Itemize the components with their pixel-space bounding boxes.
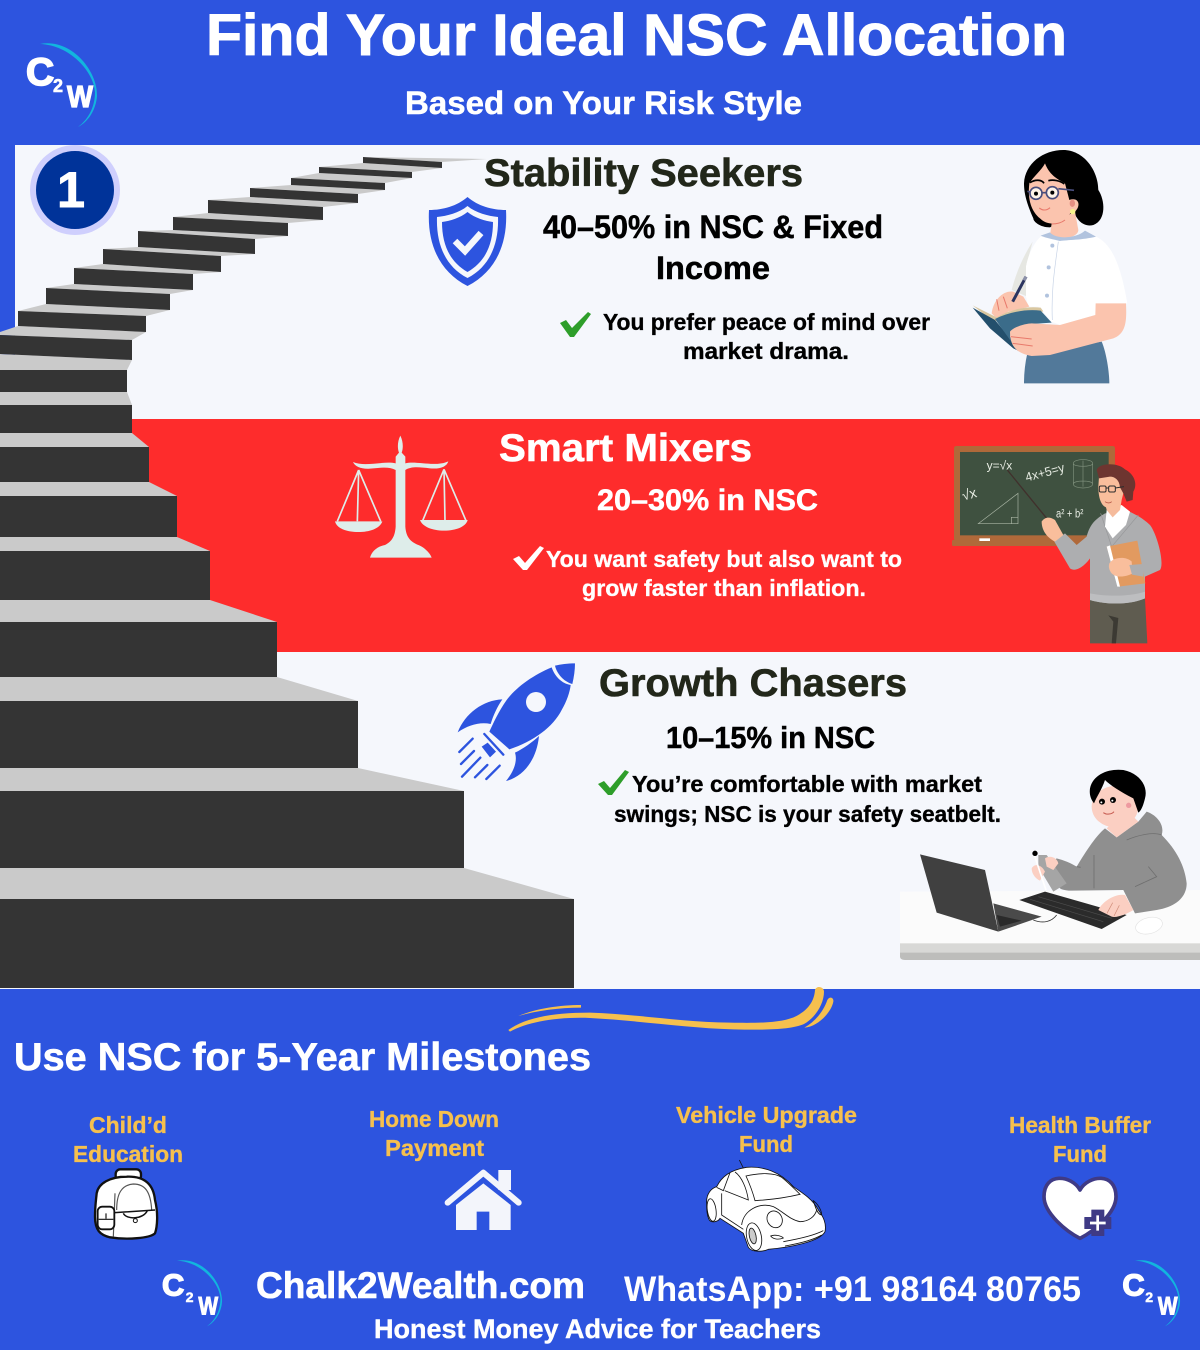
icon: green check 3: [598, 770, 629, 795]
milestone label: Vehicle Upgrade Fund: Vehicle Upgrade: [676, 1102, 857, 1128]
logo: C2W footer right: W: [1158, 1292, 1178, 1320]
logo: C2W footer left: [162, 1260, 222, 1326]
step number badge: 1: [57, 162, 85, 218]
logo: C2W header: W: [67, 79, 94, 114]
title: Find Your Ideal NSC Allocation: [206, 3, 1067, 68]
logo: C2W header: C: [26, 51, 54, 94]
panel: growth chasers: [0, 652, 1200, 989]
allocation: 10–15% in NSC: 10–15% in NSC: [666, 720, 875, 755]
heading: Use NSC for 5-Year Milestones: Use NSC for 5-Year Milestones: [14, 1036, 591, 1079]
illustration: teacher at chalkboard: 4x+5=y: [1024, 461, 1067, 485]
allocation: 40–50% in NSC & Fixed Income: [543, 209, 883, 286]
logo: C2W footer right: 2: [1145, 1290, 1153, 1306]
logo: C2W footer right: C: [1122, 1268, 1145, 1303]
allocation: 40–50% in NSC & Fixed Income: 40–50% in NSC & Fixed: [543, 209, 883, 245]
logo: C2W footer right: [1122, 1260, 1180, 1326]
text: smart mixers description: grow faster than inflation.: [582, 575, 866, 601]
illustration: teacher at chalkboard: a² + b²: [1056, 506, 1083, 520]
text: growth chasers description: You’re comfortable with market: [632, 771, 982, 797]
allocation: 40–50% in NSC & Fixed Income: Income: [656, 250, 770, 286]
logo: C2W header: 2: [53, 76, 63, 96]
icon: balance scales: [335, 436, 468, 558]
milestone label: Health Buffer Fund: Health Buffer: [1009, 1112, 1151, 1138]
milestone label: Health Buffer Fund: Fund: [1053, 1141, 1107, 1167]
website: Chalk2Wealth.com: [256, 1265, 585, 1306]
milestone label: Home Down Payment: Home Down: [369, 1106, 499, 1132]
heading: Growth Chasers: Growth Chasers: [599, 662, 907, 705]
heading: Smart Mixers: Smart Mixers: [499, 427, 752, 470]
icon: rocket: [458, 663, 575, 781]
tagline: Honest Money Advice for Teachers: [374, 1314, 821, 1344]
milestone label: Vehicle Upgrade Fund: [676, 1102, 857, 1157]
milestone label: Home Down Payment: [369, 1106, 499, 1161]
logo: C2W footer left: C: [162, 1268, 184, 1303]
allocation: 20–30% in NSC: 20–30% in NSC: [597, 484, 818, 517]
subtitle: Based on Your Risk Style: [405, 85, 802, 121]
milestone label: Child'd Education: Education: [73, 1141, 183, 1167]
WhatsApp contact: WhatsApp: +91 98164 80765: [624, 1270, 1081, 1309]
milestone label: Child'd Education: Child’d: [89, 1112, 167, 1138]
heading: Stability Seekers: Stability Seekers: [484, 152, 803, 195]
text: stability seekers description: You prefer peace of mind over: [603, 309, 930, 335]
text: stability seekers description: market drama.: [683, 338, 849, 364]
icon: white check: [513, 546, 544, 570]
panel: stability seekers: [15, 145, 1200, 419]
text: smart mixers description: [546, 546, 902, 601]
illustration: teacher at chalkboard: y=√x: [987, 458, 1012, 472]
icon: house: [448, 1170, 519, 1230]
icon: car: [706, 1160, 825, 1252]
text: growth chasers description: swings; NSC is your safety seatbelt.: [614, 801, 1001, 827]
milestone label: Child'd Education: [73, 1112, 183, 1167]
decorative swoosh: [508, 987, 833, 1032]
logo: C2W footer left: W: [198, 1292, 218, 1320]
illustration: teacher at chalkboard: [952, 446, 1162, 643]
illustration: woman writing in a notebook: [973, 150, 1127, 383]
text: smart mixers description: You want safety but also want to: [546, 546, 902, 572]
milestone label: Vehicle Upgrade Fund: Fund: [739, 1131, 793, 1157]
text: stability seekers description: [603, 309, 930, 364]
icon: heart with plus: [1044, 1178, 1116, 1238]
staircase: [0, 157, 574, 988]
milestone label: Home Down Payment: Payment: [385, 1135, 484, 1161]
step number badge: [30, 145, 120, 235]
logo: C2W footer left: 2: [186, 1290, 194, 1306]
panel: smart mixers: [0, 419, 1200, 652]
milestone label: Health Buffer Fund: [1009, 1112, 1151, 1167]
text: growth chasers description: [614, 771, 1001, 827]
icon: backpack: [95, 1169, 157, 1239]
illustration: teacher at chalkboard: √x: [960, 484, 978, 504]
logo: C2W header: [26, 43, 97, 127]
icon: shield with check: [429, 197, 506, 286]
illustration: person working at desk: [900, 770, 1200, 960]
icon: green check 1: [560, 312, 591, 337]
